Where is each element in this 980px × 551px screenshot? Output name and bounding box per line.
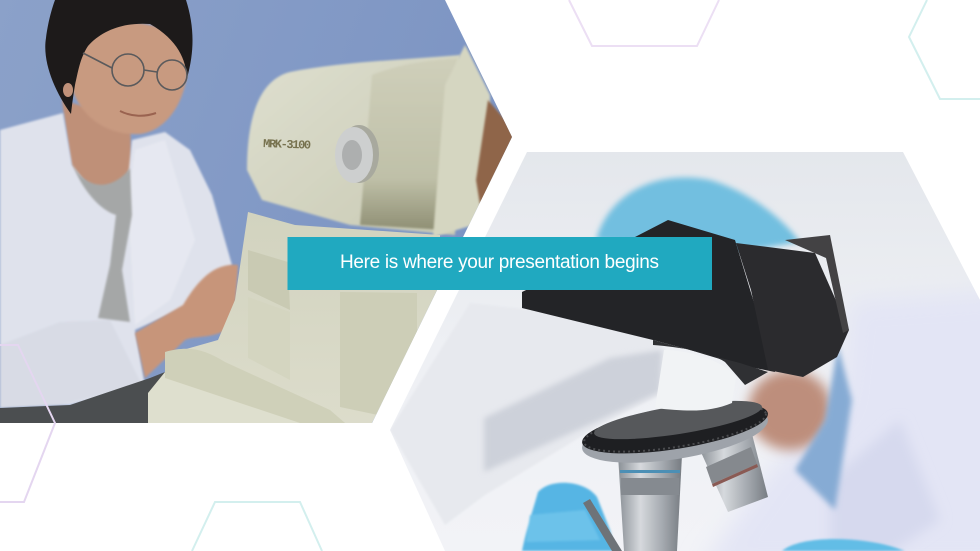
machine panels <box>248 250 290 310</box>
ear <box>63 83 73 97</box>
machine base <box>148 372 300 423</box>
scientist face <box>748 370 832 450</box>
title text: Here is where your presentation begins <box>340 252 659 273</box>
glasses <box>83 53 187 90</box>
face <box>72 22 188 134</box>
stage disk <box>582 400 768 463</box>
lab coat <box>0 113 232 408</box>
neck <box>61 100 132 186</box>
trousers and desk shadow <box>0 372 165 423</box>
patient face <box>474 100 512 204</box>
second glove <box>782 539 905 551</box>
eyepiece housing <box>736 243 849 377</box>
objective lens: centre <box>618 455 682 551</box>
eyepiece collar <box>653 340 768 385</box>
arm shadow side <box>484 350 662 472</box>
machine knob <box>335 125 379 183</box>
machine head side block <box>360 58 458 230</box>
decorative hexagon outline: lower left <box>0 345 55 502</box>
objective lens: right <box>702 436 768 512</box>
neck of microscope <box>655 350 736 411</box>
decorative hexagon outline: bottom centre <box>192 502 322 551</box>
machine lower body <box>165 212 440 423</box>
blue glove <box>522 483 615 551</box>
mouth <box>120 111 156 116</box>
photo: scientist at microscope <box>380 150 980 551</box>
photo: doctor with eye examination machine <box>0 0 520 430</box>
blue cap <box>596 178 800 252</box>
forearm and hand <box>135 265 238 378</box>
tweezers <box>583 499 622 551</box>
machine head <box>247 55 460 235</box>
eyepiece body <box>522 220 775 372</box>
model label text: MRK-3100 <box>263 137 311 153</box>
microscope arm upper surface <box>392 401 591 523</box>
eyepiece lens strip <box>785 235 849 333</box>
lab coat <box>717 306 980 551</box>
blue collar <box>795 345 852 510</box>
wall background <box>0 0 520 430</box>
hair <box>45 0 193 114</box>
machine vertical panel <box>433 45 490 237</box>
decorative hexagon outline: top centre <box>569 0 719 46</box>
sweater <box>72 163 132 322</box>
coat shade <box>832 428 934 546</box>
title banner <box>288 237 712 290</box>
decorative hexagon outline: top right <box>909 0 980 99</box>
blurred lab background <box>380 150 980 551</box>
